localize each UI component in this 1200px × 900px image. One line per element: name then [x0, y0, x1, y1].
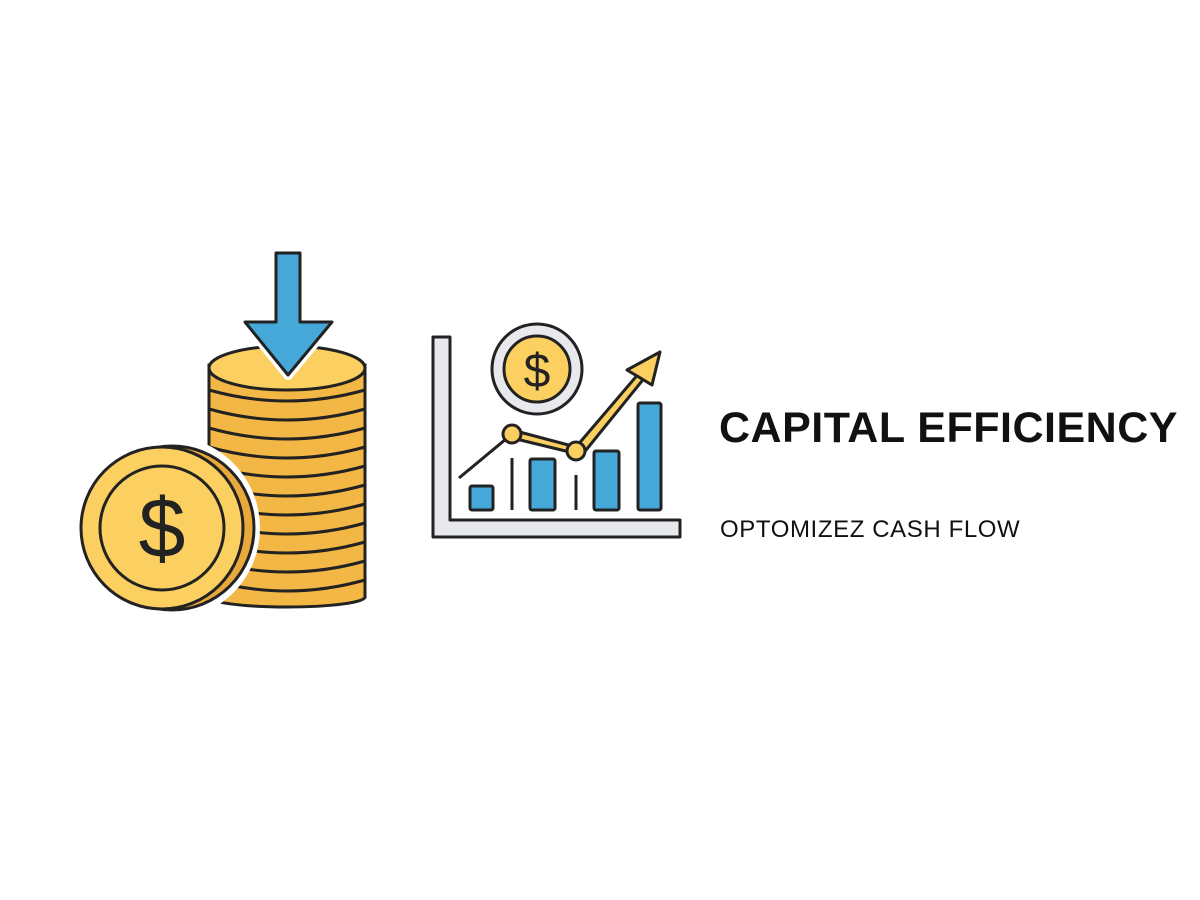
- chart: trend line with arrow: [459, 352, 660, 478]
- icon: coin stack: [209, 346, 365, 607]
- icon: small dollar coin: $: [524, 345, 550, 398]
- icon: small dollar coin: [492, 324, 582, 414]
- chart: axes: [433, 337, 680, 537]
- subtitle: OPTOMIZEZ CASH FLOW: [720, 516, 1020, 543]
- icon: large dollar coin: [76, 436, 260, 620]
- chart: bars: [470, 403, 661, 510]
- icon: down arrow: [245, 253, 332, 375]
- title: CAPITAL EFFICIENCY: [719, 404, 1178, 452]
- icon: large dollar coin: $: [139, 481, 185, 575]
